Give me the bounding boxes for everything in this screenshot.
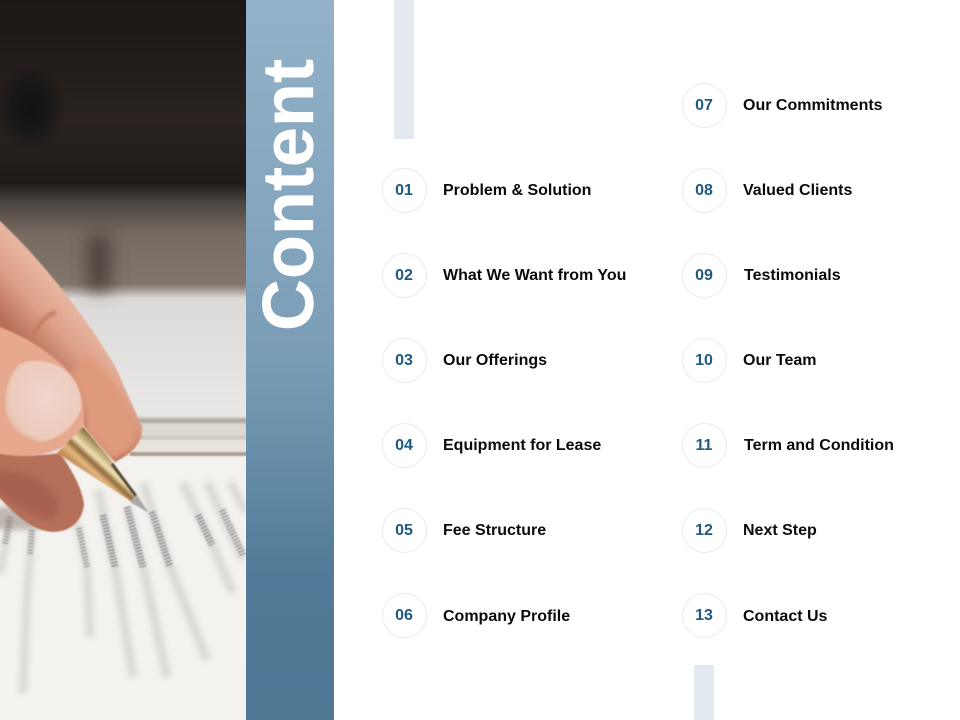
photo: hand writing with a pen on a document (0, 0, 246, 720)
item 13 (682, 593, 827, 638)
item 13: Contact Us (743, 608, 827, 625)
item 11: Term and Condition (744, 437, 894, 454)
item 01: Problem & Solution (443, 182, 591, 199)
item 13: 13 (695, 607, 713, 624)
item 03: Our Offerings (443, 352, 547, 369)
item 01: 01 (395, 182, 413, 199)
item 12 (682, 508, 817, 553)
item 04: 04 (395, 437, 413, 454)
item 09: 09 (695, 267, 713, 284)
item 10: Our Team (743, 352, 816, 369)
item 04 (382, 423, 601, 468)
item 05: Fee Structure (443, 522, 546, 539)
finger shadow on paper (0, 506, 60, 530)
item 09 (682, 253, 841, 298)
item 06 (382, 593, 570, 638)
title: Content (248, 59, 328, 331)
item 02 (382, 253, 626, 298)
index finger (0, 210, 142, 462)
item 08: 08 (695, 182, 713, 199)
panel: vertical title band (246, 0, 334, 720)
item 01 (382, 168, 591, 213)
item 12: Next Step (743, 522, 817, 539)
thumb with nail (0, 323, 84, 456)
pen (57, 427, 137, 502)
paper lower sheet (0, 456, 246, 720)
item 06: 06 (395, 607, 413, 624)
item 05: 05 (395, 522, 413, 539)
item 03: 03 (395, 352, 413, 369)
item 02: 02 (395, 267, 413, 284)
item 07: 07 (695, 97, 713, 114)
blurred printed text lines (0, 482, 246, 693)
decorative bar: bottom (694, 665, 714, 720)
item 11 (682, 423, 894, 468)
item 02: What We Want from You (443, 267, 626, 284)
item 07 (682, 83, 883, 128)
item 12: 12 (695, 522, 713, 539)
item 11: 11 (696, 437, 712, 454)
item 08 (682, 168, 852, 213)
item 09: Testimonials (744, 267, 841, 284)
item 10: 10 (695, 352, 713, 369)
bottom finger (0, 448, 84, 532)
item 06: Company Profile (443, 608, 570, 625)
item 05 (382, 508, 546, 553)
item 07: Our Commitments (743, 97, 883, 114)
item 03 (382, 338, 547, 383)
decorative bar: top (394, 0, 414, 139)
item 10 (682, 338, 816, 383)
item 08: Valued Clients (743, 182, 852, 199)
item 04: Equipment for Lease (443, 437, 601, 454)
